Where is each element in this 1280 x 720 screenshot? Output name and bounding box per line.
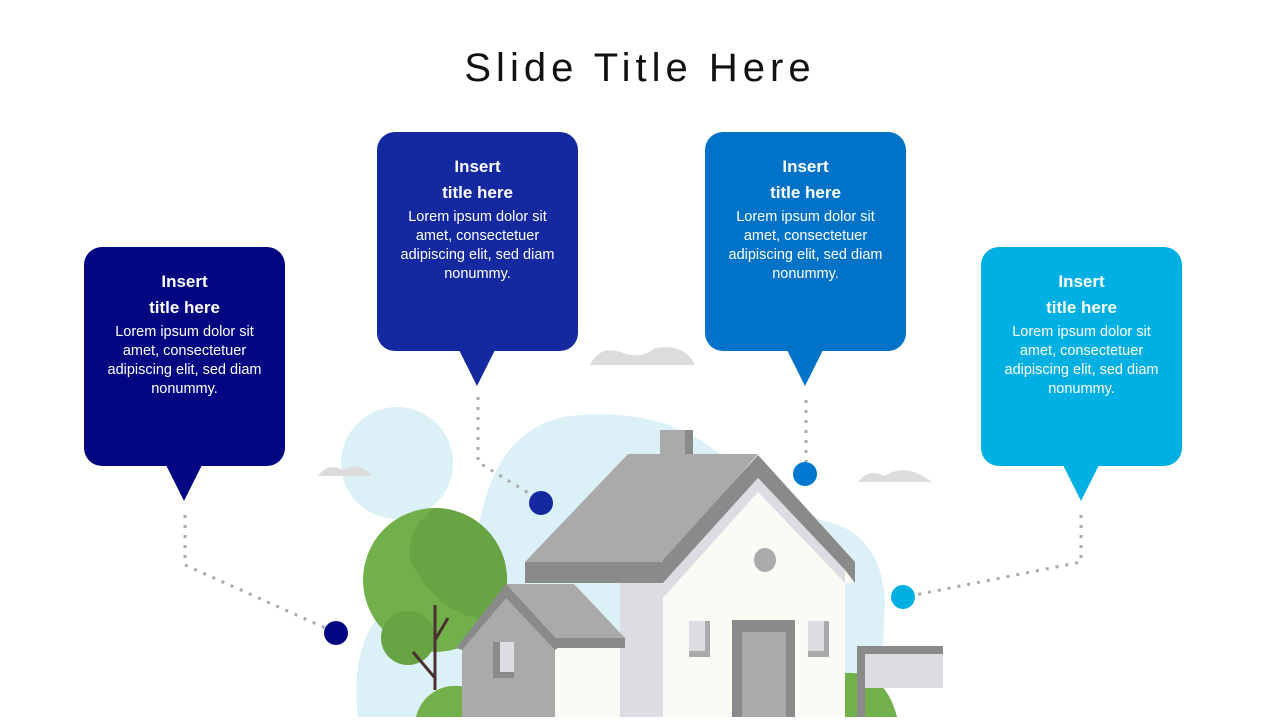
callout 1: Insert bbox=[161, 272, 208, 291]
callout 2: Insert bbox=[454, 157, 501, 176]
callout 3: title here bbox=[770, 183, 841, 202]
trees bbox=[363, 508, 897, 717]
callout 3: Insert bbox=[782, 157, 829, 176]
callout 4 bbox=[981, 247, 1182, 466]
callout 2 bbox=[377, 132, 578, 351]
title: Slide Title Here bbox=[464, 46, 816, 90]
callout 2: title here bbox=[442, 183, 513, 202]
house bbox=[456, 430, 943, 717]
callout 2: Lorem ipsum dolor sit amet, consectetuer adipiscing elit, sed diam nonummy. bbox=[401, 209, 554, 282]
marker dots bbox=[324, 462, 915, 645]
callout 3: Lorem ipsum dolor sit amet, consectetuer adipiscing elit, sed diam nonummy. bbox=[729, 209, 882, 282]
callout 4: Lorem ipsum dolor sit amet, consectetuer adipiscing elit, sed diam nonummy. bbox=[1005, 324, 1158, 397]
callout 1: title here bbox=[149, 298, 220, 317]
callout 1: Lorem ipsum dolor sit amet, consectetuer adipiscing elit, sed diam nonummy. bbox=[108, 324, 261, 397]
callout 4: title here bbox=[1046, 298, 1117, 317]
dotted connectors bbox=[185, 397, 1081, 630]
callout 4: Insert bbox=[1058, 272, 1105, 291]
callout 1 bbox=[84, 247, 285, 466]
callout 3 bbox=[705, 132, 906, 351]
